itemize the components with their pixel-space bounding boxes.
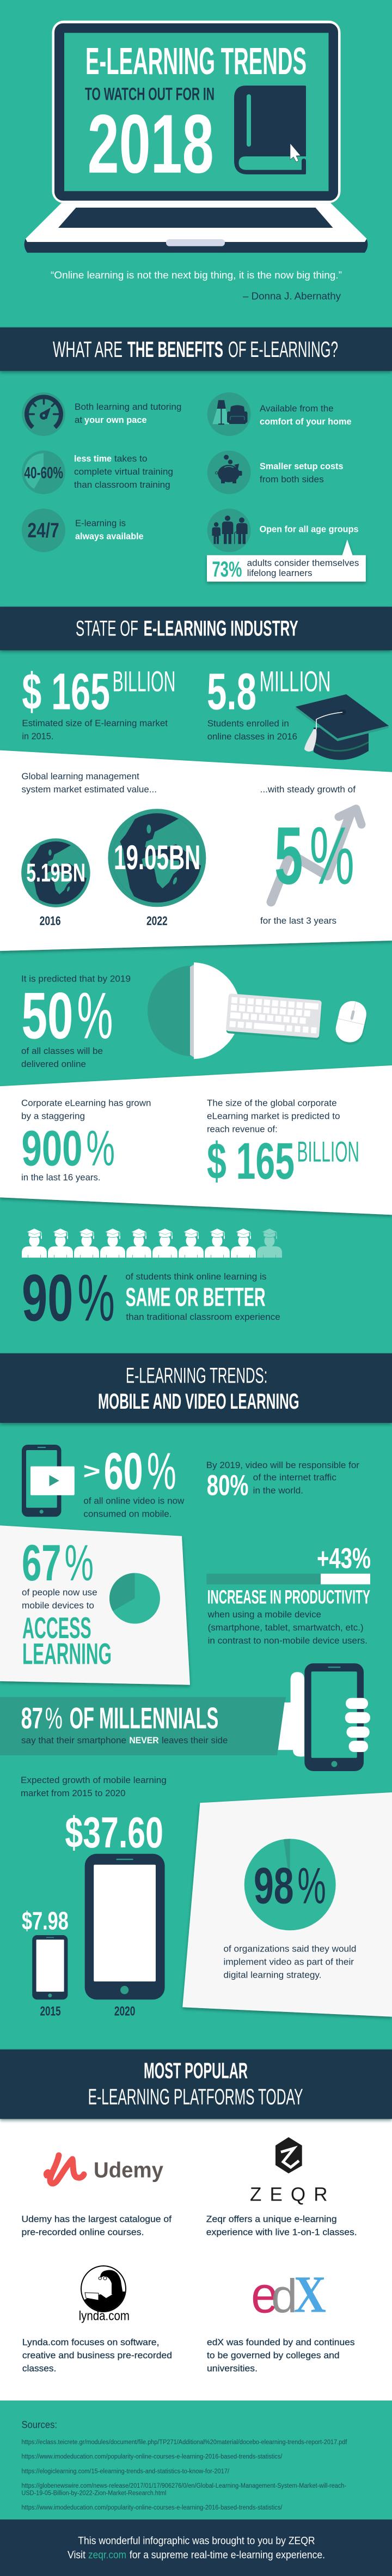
source links: https://www.imodeducation.com/popularity-online-courses-e-learning-2016-based-trends-statistics/ — [22, 2454, 283, 2460]
panel: benefits — [22, 392, 366, 581]
stat: 43 percent productivity: when using a mobile device — [207, 1609, 321, 1620]
source links: https://globenewswire.com/news-release/2017/01/17/906276/0/en/Global-Learning-Management-System-Market-will-reach- — [22, 2483, 346, 2489]
panel: platforms heading: MOST POPULAR — [144, 2058, 248, 2083]
bar: productivity — [206, 1574, 370, 1584]
benefit text — [260, 461, 343, 484]
icon: 24/7 circle: 24/7 — [27, 519, 59, 542]
text: organizations video: digital learning strategy. — [223, 1969, 321, 1980]
text: udemy description — [22, 2214, 171, 2237]
stat: 90 percent same or better: 90 — [22, 1260, 73, 1335]
hero laptop — [24, 21, 367, 253]
bar: 2015 phone: 2015 — [40, 2004, 61, 2019]
stat: 165 billion revenue: The size of the global corporate — [207, 1098, 337, 1108]
band: 87 percent of millennials: % — [45, 1701, 63, 1735]
stat: 80 percent internet traffic: in the world. — [253, 1486, 303, 1496]
text: global lms market: Global learning management — [22, 771, 139, 781]
stat: 50 percent of classes online: % — [77, 979, 113, 1053]
chart: globe 2022: 2022 — [146, 914, 168, 928]
chart: device size comparison — [22, 1808, 165, 2019]
stat: 80 percent internet traffic: 80% — [207, 1469, 248, 1501]
stat: 90 percent same or better — [22, 1260, 280, 1335]
band: 87 percent of millennials: OF MILLENNIALS — [70, 1701, 218, 1735]
heading: sources: Sources: — [22, 2420, 57, 2430]
logo: edX: e — [251, 2266, 278, 2324]
panel: white section market value — [0, 750, 392, 951]
benefit text: than classroom training — [74, 480, 170, 490]
icon: lamp and armchair — [207, 392, 251, 436]
chart: globe 2016: 2016 — [40, 914, 61, 928]
panel: footer — [0, 2519, 392, 2576]
stat: over 60 percent video on mobile: % — [147, 1442, 176, 1501]
text: lynda description — [22, 2337, 172, 2373]
logo: edX: d — [271, 2270, 297, 2323]
stat: 43 percent productivity: in contrast to non-mobile device users. — [208, 1635, 367, 1646]
band: 87 percent of millennials: 87 — [21, 1701, 43, 1735]
icon: 24/7 circle — [22, 508, 65, 552]
stat: 50 percent of classes online: of all classes will be — [21, 1046, 103, 1056]
icon: graduation cap — [296, 694, 389, 760]
laptop screen — [64, 33, 329, 191]
benefit text: your own pace — [84, 415, 147, 425]
callout: 73 percent lifelong learners: adults consider themselves — [247, 557, 359, 568]
stat: over 60 percent video on mobile: of all online video is now — [83, 1495, 185, 1506]
band: 87 percent of millennials: leaves their side — [162, 1735, 228, 1745]
source links — [22, 2439, 347, 2511]
source links: https://www.imodeducation.com/popularity-online-courses-e-learning-2016-based-trends-statistics/ — [22, 2505, 283, 2511]
text: people use mobile: of people now use — [22, 1587, 97, 1597]
icon: 40-60 percent pie — [22, 451, 65, 494]
stat: 165 billion market — [22, 663, 175, 742]
arrow: growth — [271, 809, 362, 902]
panel: footer: Visit — [68, 2549, 86, 2561]
bar: 2020 tablet: 2020 — [114, 2004, 135, 2019]
stat: 90 percent same or better: SAME OR BETTER — [125, 1283, 266, 1312]
benefit: own pace — [22, 392, 181, 436]
benefit text: comfort of your home — [260, 416, 352, 427]
benefit: less time — [22, 451, 173, 494]
panel: paper card 67 percent — [0, 1525, 190, 1685]
text: edx description: edX was founded by and continues — [207, 2337, 355, 2347]
stat: 80 percent internet traffic: By 2019, video will be responsible for — [206, 1460, 359, 1470]
text: people use mobile: mobile devices to — [22, 1600, 94, 1610]
benefit text: takes to — [114, 453, 147, 464]
text: mobile learning growth — [21, 1775, 167, 1798]
heading: access learning: ACCESS — [22, 1611, 91, 1645]
stat: 80 percent internet traffic — [206, 1460, 359, 1501]
panel: state of e-learning heading: E-LEARNING INDUSTRY — [144, 617, 298, 641]
stat: 43 percent productivity: (smartphone, tablet, smartwatch, etc.) — [208, 1622, 364, 1633]
stat: over 60 percent video on mobile: 60 — [104, 1442, 143, 1501]
text: mobile learning growth: Expected growth of mobile learning — [21, 1775, 167, 1785]
icon: gauge — [22, 392, 65, 436]
band: 87 percent of millennials: NEVER — [129, 1735, 159, 1745]
benefit text: complete virtual training — [74, 466, 173, 477]
quote — [51, 270, 342, 302]
benefit: comfort of home — [207, 392, 352, 436]
stat: 50 percent of classes online — [21, 974, 131, 1069]
benefit text — [74, 453, 173, 490]
panel: benefits heading — [0, 328, 392, 371]
stat: 5 percent growth: ...with steady growth of — [260, 784, 356, 795]
text: mobile learning growth: market from 2015 to 2020 — [21, 1788, 125, 1798]
logo: zeqr: ZEQR — [250, 2184, 328, 2205]
stat: 67 percent: 67 — [22, 1534, 61, 1591]
chart: half pie — [148, 962, 241, 1059]
benefit text — [75, 518, 144, 542]
callout: 73 percent lifelong learners: 73% — [212, 557, 242, 581]
benefit text: less time — [74, 453, 112, 464]
source links: https://elogiclearning.com/15-elearning-trends-and-statistics-to-know-for-2017/ — [22, 2468, 230, 2475]
text: global lms market — [22, 771, 157, 795]
stat: 900 percent growth: by a staggering — [21, 1111, 85, 1121]
benefit text: Available from the — [260, 403, 334, 414]
panel: white section platforms — [0, 2117, 392, 2401]
heading: access learning — [22, 1611, 112, 1670]
stat: 90 percent same or better: % — [77, 1260, 115, 1335]
logo: lynda.com — [79, 2266, 130, 2324]
stat: 165 billion market: Estimated size of E-learning market — [22, 718, 168, 729]
stat: 98 percent: % — [297, 1857, 326, 1914]
text: zeqr description: experience with live 1-on-1 classes. — [206, 2227, 357, 2237]
text: organizations video — [223, 1943, 356, 1980]
logo: lynda.com: lynda.com — [79, 2309, 130, 2324]
icon: keyboard — [225, 993, 322, 1040]
stat: 5.8 million students: MILLION — [260, 665, 331, 698]
stat: 165 billion revenue: reach revenue of: — [207, 1124, 278, 1134]
stat: 5 percent growth — [260, 784, 362, 926]
panel: paper card 98 percent — [182, 1792, 392, 2017]
stat: 5 percent growth: 5 — [274, 810, 303, 901]
logo: edX — [251, 2265, 326, 2324]
stat: 50 percent of classes online: delivered online — [21, 1059, 86, 1069]
source links: https://eclass.teicrete.gr/modules/document/file.php/TP271/Additional%20material/docebo-elearning-trends-report-2017.pdf — [22, 2439, 347, 2446]
icon: 40-60 percent pie: 40-60% — [24, 464, 63, 482]
benefit text — [75, 402, 181, 425]
panel: sources — [0, 2401, 392, 2519]
title year: 2018 — [88, 98, 214, 191]
panel: benefits heading: THE BENEFITS — [127, 337, 223, 362]
callout: 73 percent lifelong learners: lifelong learners — [247, 568, 313, 578]
icon: mouse — [333, 998, 370, 1047]
trackpad — [166, 239, 225, 246]
benefit: always available — [22, 508, 144, 552]
stat: 165 billion market: $ 165 — [22, 663, 110, 721]
text: people use mobile — [22, 1587, 97, 1610]
stat: 900 percent growth: % — [86, 1120, 115, 1176]
text: global lms market: system market estimated value... — [22, 784, 157, 795]
benefit: all age groups — [207, 508, 358, 552]
band: 87 percent of millennials — [0, 1697, 286, 1755]
stat: 165 billion market: in 2015. — [22, 731, 53, 742]
stat: 80 percent internet traffic: of the internet traffic — [253, 1472, 337, 1483]
icon: book with cursor — [234, 86, 307, 174]
stat: 165 billion market: BILLION — [113, 665, 175, 698]
stat: 900 percent growth: Corporate eLearning has grown — [21, 1098, 151, 1108]
bar: 2015 phone: $7.98 — [22, 1907, 69, 1935]
stat: 5.8 million students: Students enrolled in — [207, 718, 289, 729]
stat: 165 billion revenue — [207, 1098, 359, 1190]
stat: 43 percent productivity — [206, 1542, 371, 1646]
panel: footer: This wonderful infographic was brought to you by ZEQR — [78, 2536, 315, 2547]
text: lynda description: creative and business pre-recorded — [22, 2350, 172, 2360]
stat: 50 percent of classes online: 50 — [22, 979, 73, 1053]
stat: 90 percent same or better: of students think online learning is — [125, 1271, 267, 1282]
panel: state of e-learning heading: STATE OF — [76, 617, 138, 641]
title — [85, 40, 307, 191]
laptop deck — [26, 203, 367, 242]
benefit text: Both learning and tutoring — [75, 402, 181, 412]
stat: 5.8 million students: 5.8 — [207, 663, 256, 721]
text: lynda description: Lynda.com focuses on software, — [22, 2337, 160, 2347]
panel: benefits heading: WHAT ARE — [53, 337, 122, 362]
benefit text: E-learning is — [75, 518, 126, 529]
quote author: – Donna J. Abernathy — [243, 291, 341, 302]
stat: 165 billion revenue: eLearning market is predicted to — [207, 1111, 340, 1121]
benefit text: Open for all age groups — [260, 524, 358, 534]
bar: 2015 phone — [22, 1907, 69, 2019]
stat: percent sign: % — [64, 1534, 94, 1591]
logo: udemy: Udemy — [94, 2159, 164, 2183]
text: edx description: to be governed by colleges and — [207, 2350, 340, 2360]
stat: 90 percent same or better: than traditional classroom experience — [126, 1312, 280, 1322]
stat: 900 percent growth: in the last 16 years. — [21, 1172, 101, 1183]
panel: platforms heading — [0, 2050, 392, 2119]
stat: 5 percent growth: % — [309, 810, 354, 901]
laptop base bottom — [24, 239, 367, 253]
laptop frame — [52, 21, 341, 203]
text: zeqr description — [206, 2214, 357, 2237]
stat: 900 percent growth: 900 — [22, 1120, 83, 1176]
panel: white section corporate — [0, 1065, 392, 1215]
benefit text: from both sides — [260, 474, 324, 484]
text: organizations video: of organizations said they would — [223, 1943, 356, 1954]
icon: hand holding phone — [278, 1663, 370, 1771]
stat: 900 percent growth — [21, 1098, 151, 1183]
stat: over 60 percent video on mobile: > — [83, 1458, 101, 1483]
panel: mobile and video heading: E-LEARNING TRENDS: — [126, 1363, 267, 1387]
benefit text: at — [75, 415, 82, 425]
panel: state of e-learning heading — [0, 607, 392, 650]
chart: globe 2016: 5.19BN — [26, 859, 85, 888]
stat: 5 percent growth: for the last 3 years — [260, 916, 336, 926]
benefit text: Smaller setup costs — [260, 461, 343, 471]
panel: mobile and video heading — [0, 1353, 392, 1423]
stat: 98 percent: 98 — [254, 1857, 294, 1914]
chart: 98 percent pie — [244, 1839, 336, 1930]
quote text: “Online learning is not the next big thing, it is the now big thing.” — [51, 270, 342, 281]
text: edx description — [207, 2337, 355, 2373]
logo: zeqr — [250, 2137, 328, 2205]
laptop bezel — [54, 23, 338, 201]
chart: 67 percent pie — [109, 1573, 160, 1624]
chart: globe 2022 — [105, 806, 209, 928]
text: organizations video: implement video as part of their — [223, 1956, 354, 1967]
heading: access learning: LEARNING — [22, 1637, 112, 1670]
stat: over 60 percent video on mobile: consumed on mobile. — [83, 1508, 172, 1519]
keyboard area — [58, 208, 333, 228]
text: lynda description: classes. — [22, 2363, 56, 2373]
band: 87 percent of millennials: say that their smartphone — [21, 1735, 126, 1745]
bar: 2020 tablet: $37.60 — [65, 1808, 163, 1857]
source links: USD-19-05-Billion-by-2022-Zion-Market-Research.html — [22, 2490, 166, 2496]
title line 2: TO WATCH OUT FOR IN — [85, 84, 215, 104]
bar: 2020 tablet — [65, 1808, 165, 2019]
stat: over 60 percent video on mobile — [83, 1442, 185, 1519]
text: udemy description: pre-recorded online courses. — [22, 2227, 144, 2237]
panel: footer: for a supreme real-time e-learning experience. — [130, 2549, 325, 2561]
text: edx description: universities. — [207, 2363, 258, 2373]
callout: 73 percent lifelong learners — [207, 540, 366, 581]
icon: three generations — [207, 508, 251, 552]
stat: 5.8 million students — [207, 663, 331, 742]
stat: 50 percent of classes online: It is predicted that by 2019 — [21, 974, 131, 984]
text: udemy description: Udemy has the largest catalogue of — [22, 2214, 171, 2224]
icon: piggy bank — [207, 451, 251, 494]
chart: globe 2022: 19.05BN — [114, 839, 200, 877]
benefit text: always available — [75, 531, 144, 542]
chart: globe 2016 — [20, 837, 92, 928]
stat: 5.8 million students: online classes in 2016 — [207, 731, 297, 742]
logo: edX: X — [294, 2265, 326, 2324]
benefit text — [260, 403, 352, 427]
panel: footer: zeqr.com — [88, 2549, 126, 2561]
icon: phone with video — [22, 1445, 75, 1517]
stat: 43 percent productivity: +43% — [317, 1542, 371, 1574]
stat: 165 billion revenue: $ 165 — [207, 1132, 295, 1190]
benefit: setup costs — [207, 451, 343, 494]
text: zeqr description: Zeqr offers a unique e-learning — [206, 2214, 337, 2224]
logo: udemy — [46, 2155, 164, 2184]
pictogram: 9 of 10 students — [22, 1228, 282, 1258]
